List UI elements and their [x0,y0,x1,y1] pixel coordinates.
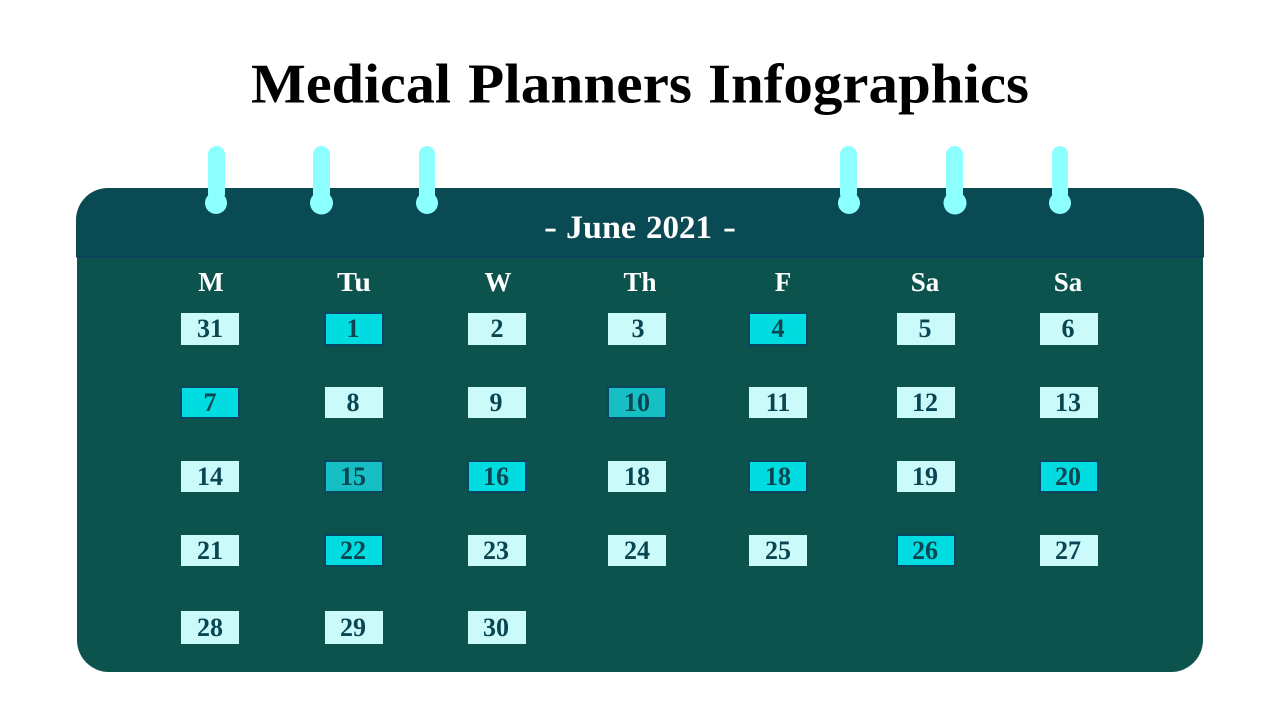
date row 2: 12 [912,388,938,417]
weekday labels [198,267,1083,297]
date row 1: 3 [632,314,644,343]
date row 2: 7 [204,388,216,417]
icon: ring 4 [838,146,860,214]
weekday labels: Th [623,267,657,297]
date row 4: 21 [197,536,223,565]
date row 1: 1 [346,314,360,343]
weekday labels: Sa [911,267,940,297]
date row 1: 6 [1062,314,1074,343]
title: Planners [468,54,692,116]
date row 3: 15 [340,462,366,491]
date row 4 [181,535,1098,566]
date row 4: 25 [765,536,791,565]
title: Medical [251,54,451,116]
month heading [544,210,736,246]
date row 3: 20 [1055,462,1081,491]
date row 4: 27 [1055,536,1081,565]
date row 1: 31 [197,314,223,343]
binder rings [205,146,1071,214]
date row 3 [181,461,1098,492]
icon: ring 1 [205,146,227,214]
date row 2: 11 [766,388,790,417]
date row 2: 8 [346,388,360,417]
date row 2 [181,387,1098,418]
title: Infographics [708,54,1029,116]
weekday labels: Tu [337,267,371,297]
icon: ring 5 [944,146,966,214]
date row 2: 13 [1055,388,1081,417]
icon: ring 6 [1049,146,1071,214]
month heading: - [544,210,557,246]
date row 5 [181,611,526,644]
date row 1 [181,313,1098,345]
date row 5: 30 [483,613,509,642]
weekday labels: W [484,267,512,297]
date row 3: 16 [483,462,509,491]
panel: calendar body [77,250,1203,672]
date row 1: 4 [772,314,784,343]
month heading: June [566,210,636,246]
date row 3: 19 [912,462,938,491]
date row 1: 2 [490,314,504,343]
date row 3: 18 [765,462,791,491]
date row 1: 5 [918,314,932,343]
date row 3: 14 [197,462,223,491]
date row 3: 18 [624,462,650,491]
date row 4: 26 [912,536,938,565]
date row 5: 29 [340,613,366,642]
panel: calendar header [76,188,1204,257]
date row 4: 22 [340,536,366,565]
icon: ring 3 [416,146,438,214]
title [251,54,1029,116]
month heading: 2021 [646,210,712,246]
weekday labels: M [198,267,224,297]
weekday labels: Sa [1054,267,1083,297]
date row 4: 23 [483,536,509,565]
date row 4: 24 [624,536,650,565]
date row 2: 9 [490,388,502,417]
icon: ring 2 [310,146,333,214]
date row 5: 28 [197,613,223,642]
weekday labels: F [775,267,791,297]
month heading: - [723,210,736,246]
date row 2: 10 [624,388,650,417]
